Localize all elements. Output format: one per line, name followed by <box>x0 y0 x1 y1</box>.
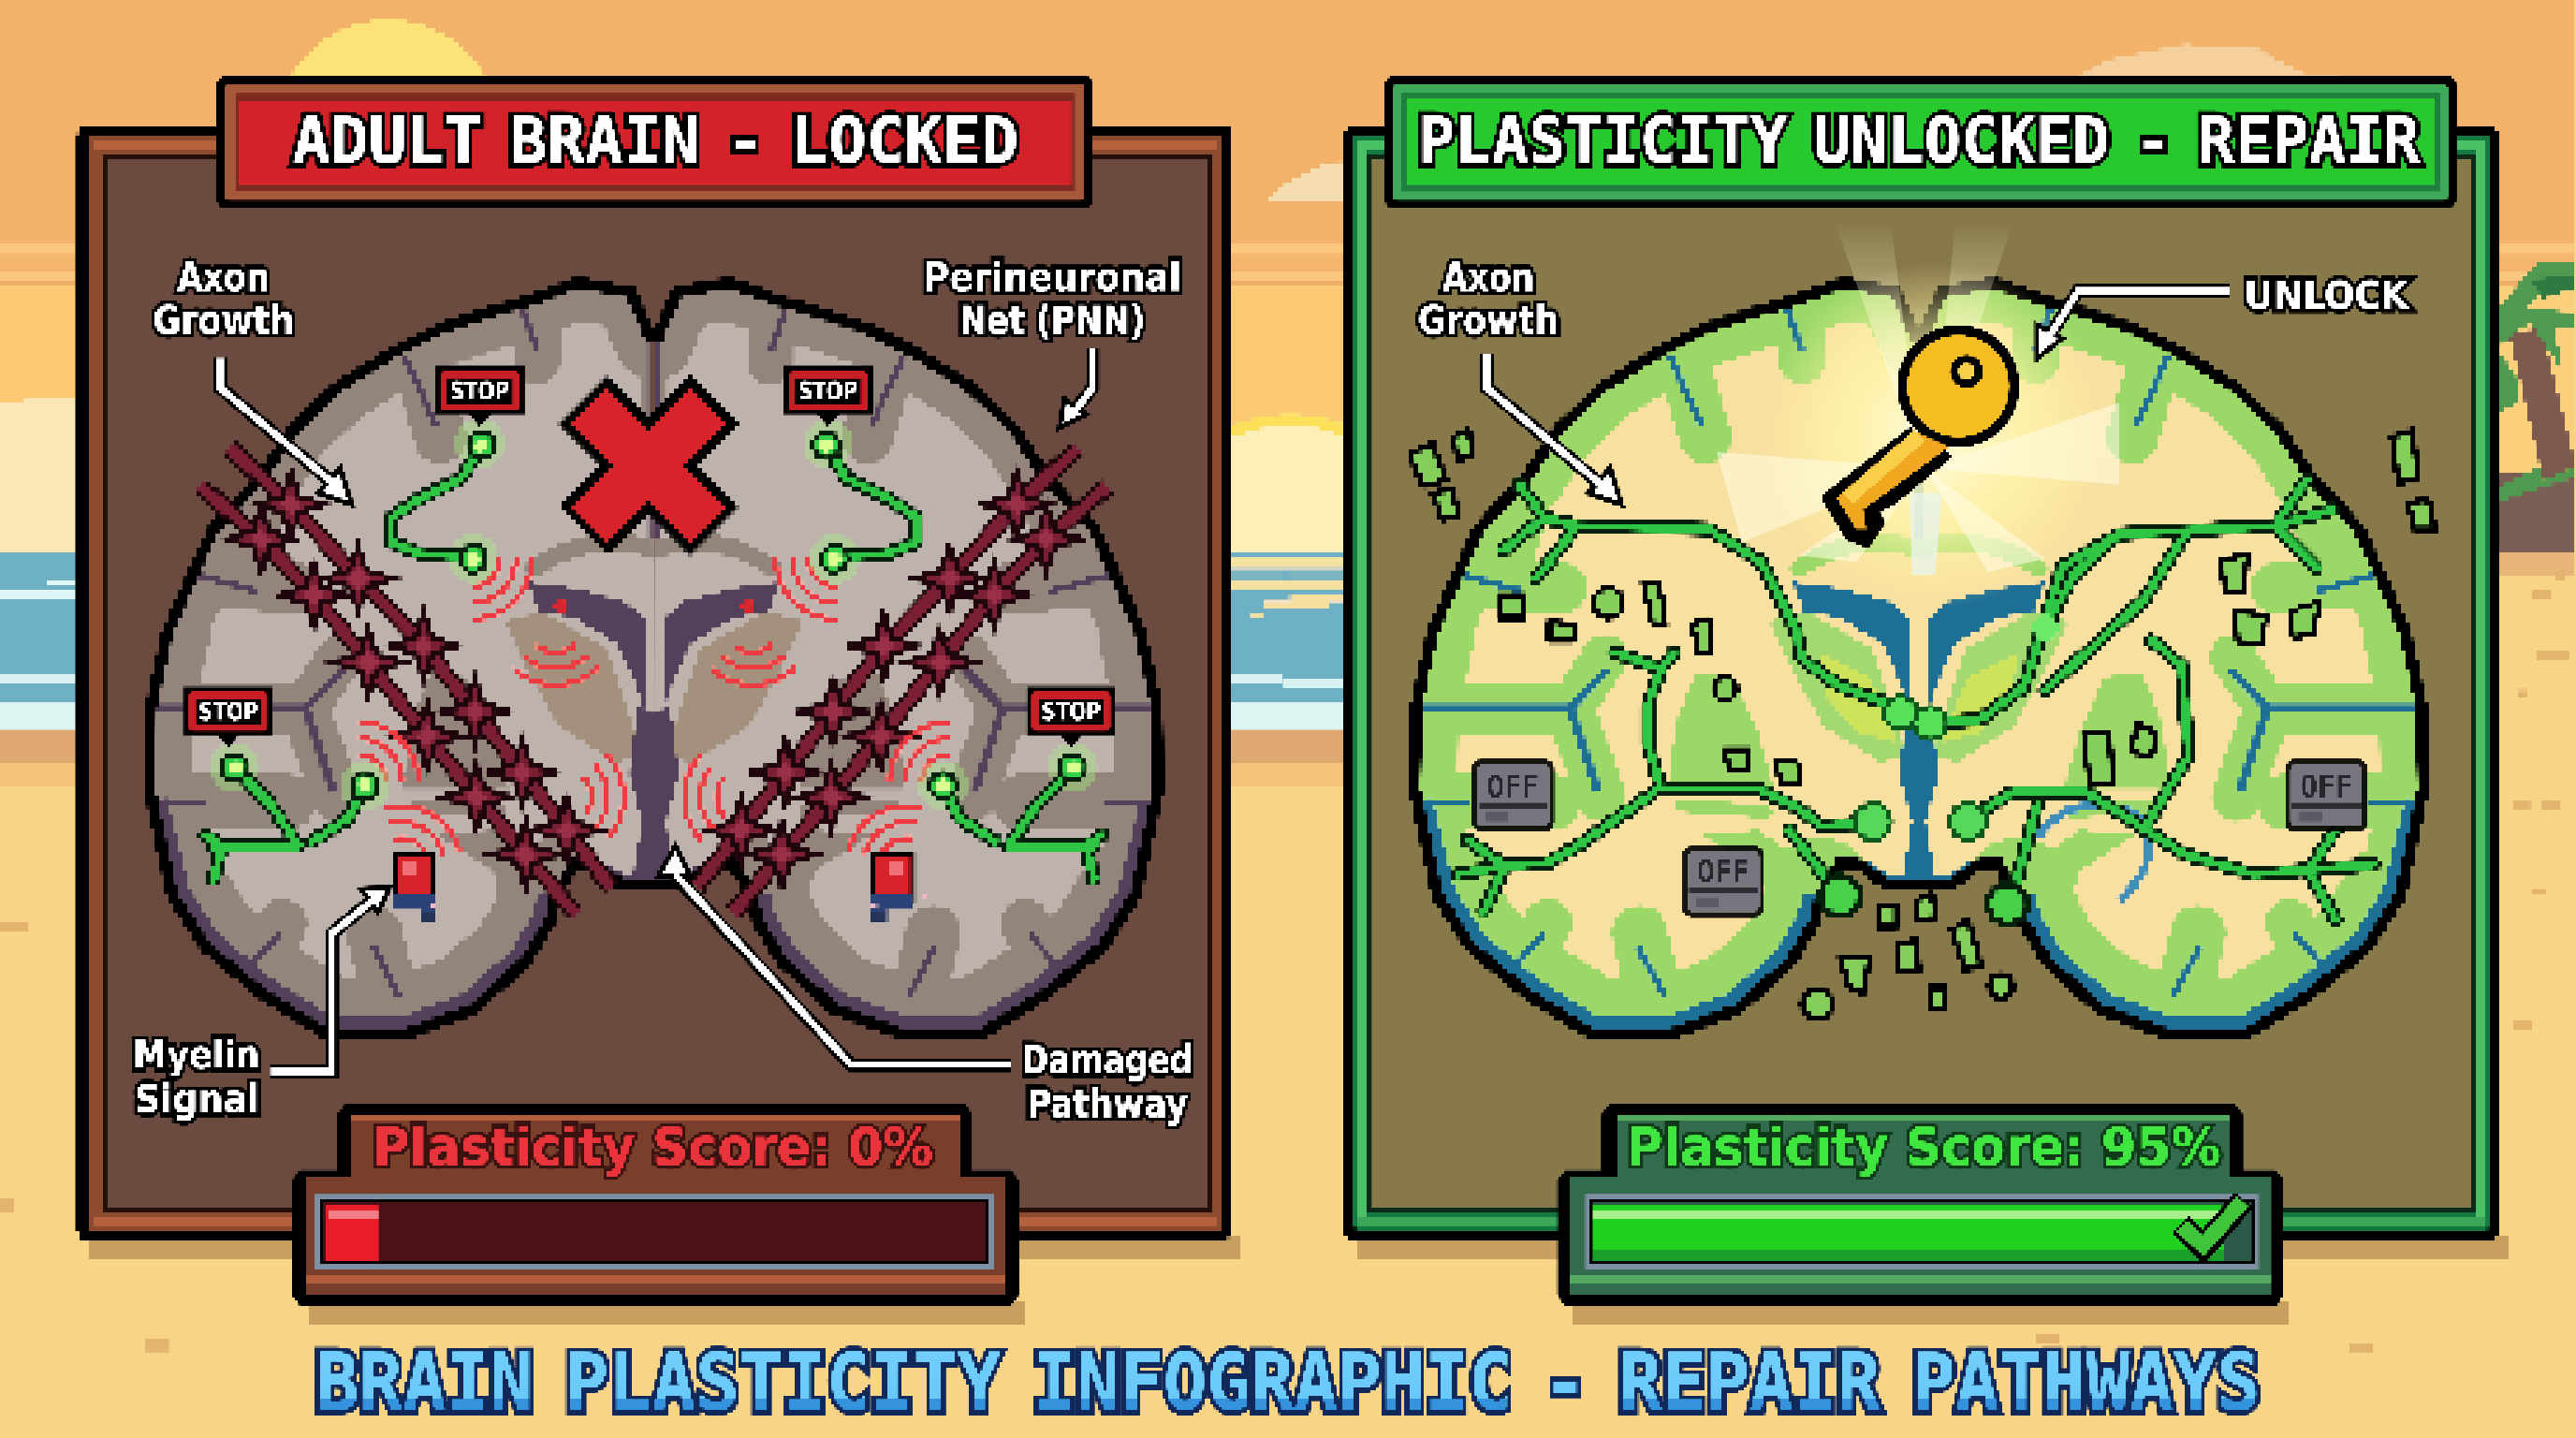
footer title: BRAIN PLASTICITY INFOGRAPHIC - REPAIR PATHWAYS <box>315 1337 2261 1429</box>
panel: plasticity unlocked <box>1344 125 2499 1240</box>
stop sign lower left: STOP <box>198 698 258 726</box>
heading: plasticity unlocked repair <box>1385 76 2456 209</box>
barbed wire, signal arcs, axons, alarms right <box>684 419 1107 922</box>
heading: adult brain locked: ADULT BRAIN - LOCKED <box>292 104 1018 179</box>
label: damaged pathway: Damaged <box>1022 1036 1193 1082</box>
label: perineuronal net: Net (PNN) <box>959 297 1145 343</box>
arrow: unlock <box>2037 291 2230 359</box>
arrow: myelin signal <box>271 888 389 1072</box>
arrow: damaged pathway <box>659 846 1010 1064</box>
progress bar <box>1586 1195 2259 1269</box>
label: myelin signal: Signal <box>135 1076 259 1122</box>
off switch left <box>1472 759 1554 831</box>
icon: red X <box>583 400 714 531</box>
off switch centre <box>1682 846 1764 917</box>
arrow: perineuronal net <box>1060 348 1092 427</box>
stop sign top left <box>437 368 522 424</box>
score text: Plasticity Score: 0% <box>373 1118 933 1179</box>
label: perineuronal net <box>923 255 1181 343</box>
heading: adult brain locked <box>217 76 1092 209</box>
label: unlock: UNLOCK <box>2244 272 2409 318</box>
label: damaged pathway: Pathway <box>1027 1081 1188 1127</box>
stop sign lower left <box>185 689 271 744</box>
right hemisphere <box>651 283 1158 1035</box>
icon: check mark <box>2180 1199 2244 1247</box>
stop sign top left: STOP <box>450 378 509 406</box>
barbed wire, signal arcs, axons, alarms left <box>200 419 623 922</box>
label: axon growth: Growth <box>153 297 294 343</box>
panel: adult brain locked <box>77 125 1232 1240</box>
brain: repaired, with growing axons <box>1410 283 2435 1035</box>
label: axon growth right panel: Axon <box>1442 255 1534 301</box>
score plate: 0% <box>292 1105 1018 1307</box>
label: myelin signal <box>133 1032 259 1122</box>
stop signs, arrows and labels: left panel <box>133 76 1193 1307</box>
axon network <box>1457 480 2374 924</box>
label: axon growth right panel <box>1418 255 1559 343</box>
off switch left: OFF <box>1486 768 1540 804</box>
score plate: 95% <box>1558 1105 2284 1307</box>
panel frame left <box>77 125 1232 1240</box>
left hemisphere <box>150 283 657 1035</box>
left hemisphere repaired <box>1414 283 1922 1035</box>
off switch right <box>2285 759 2367 831</box>
panel frame right <box>1344 125 2499 1240</box>
progress bar <box>315 1195 994 1269</box>
labels and overlays: right panel <box>1385 76 2456 1307</box>
stop sign top right: STOP <box>798 378 857 406</box>
brain: locked, with barbed wire, pulses and stalled axons <box>150 283 1158 1035</box>
label: damaged pathway <box>1022 1036 1193 1127</box>
off switch right: OFF <box>2300 768 2352 804</box>
heading: plasticity unlocked repair: PLASTICITY UNLOCKED - REPAIR <box>1418 104 2421 179</box>
swirl <box>2037 805 2149 901</box>
label: axon growth <box>153 255 294 343</box>
regrowth fragments <box>1410 431 2435 1019</box>
unlock glow and rays <box>1717 224 2119 608</box>
stop sign top right <box>785 368 871 424</box>
label: perineuronal net: Perineuronal <box>923 255 1181 301</box>
arrow: axon growth right panel <box>1486 353 1621 505</box>
off switch centre: OFF <box>1697 854 1749 890</box>
arrow: axon growth <box>220 359 352 505</box>
icon: golden key <box>1827 326 2019 542</box>
stop sign lower right <box>1029 689 1114 744</box>
stop sign lower right: STOP <box>1042 698 1101 726</box>
label: axon growth: Axon <box>178 255 270 301</box>
score text: Plasticity Score: 95% <box>1627 1118 2221 1179</box>
label: axon growth right panel: Growth <box>1418 297 1559 343</box>
right hemisphere repaired <box>1915 283 2423 1035</box>
label: myelin signal: Myelin <box>133 1032 259 1078</box>
